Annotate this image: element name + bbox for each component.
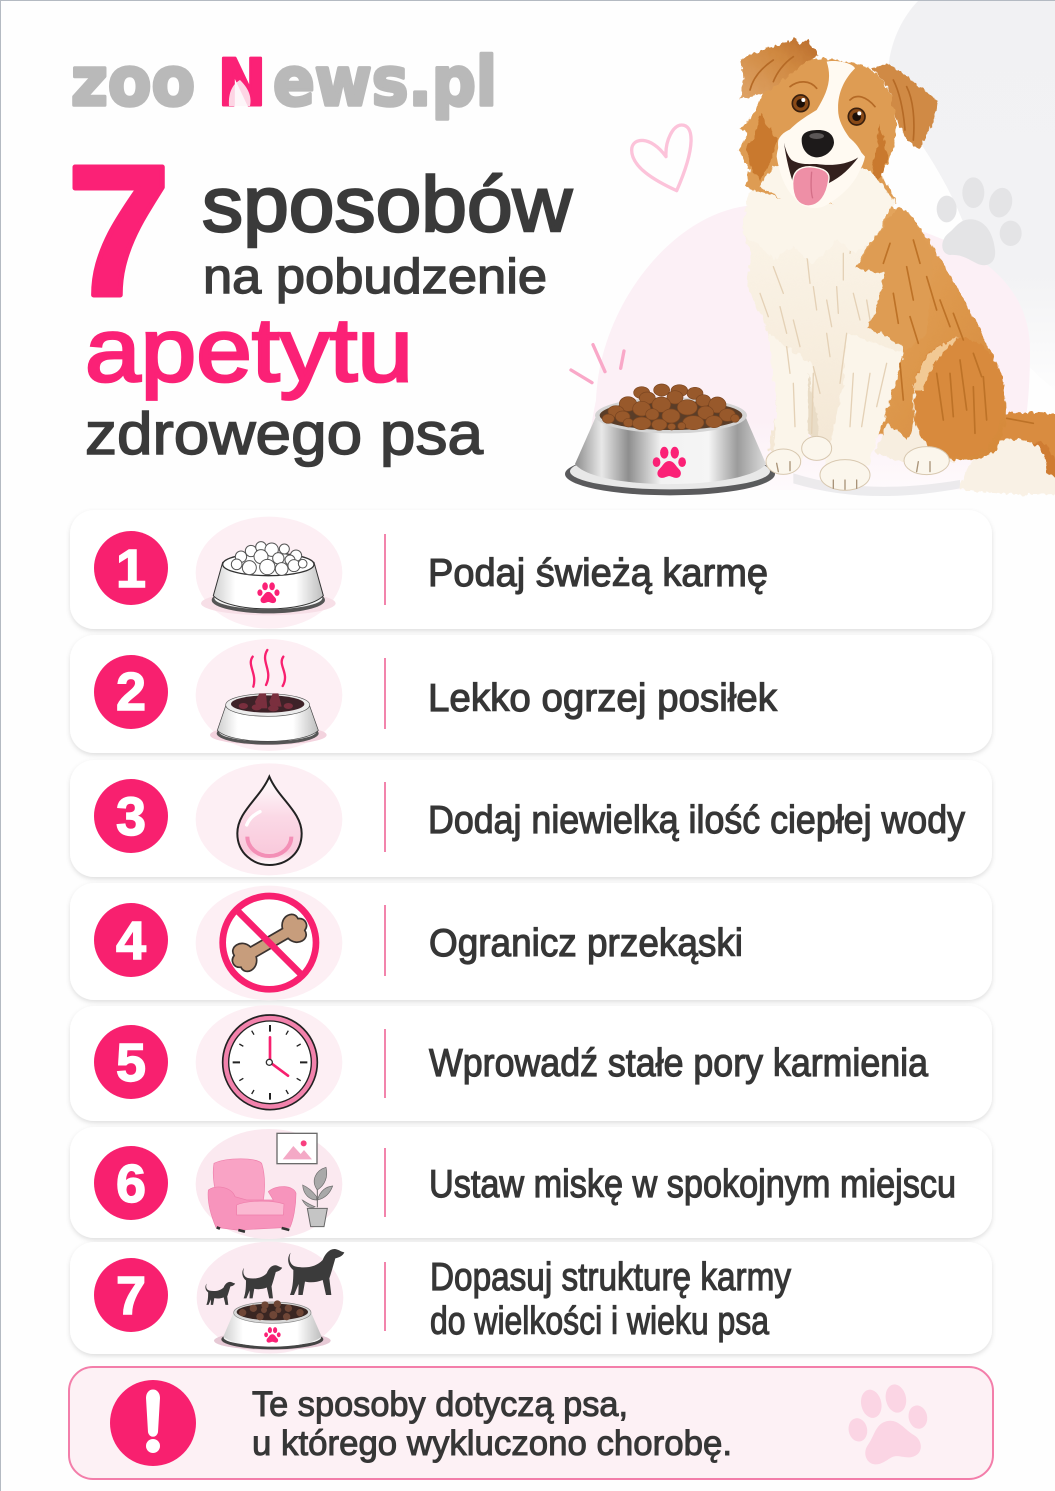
number badge [94,779,168,853]
divider [384,782,386,852]
callout panel [69,1367,993,1479]
armchair [208,1159,296,1232]
number badge [94,531,168,605]
step 1 card [70,510,992,629]
icon: food bowl [565,384,775,495]
number badge [94,903,168,977]
step 2 card [70,635,992,753]
card background [70,1127,992,1238]
icon: clock [196,1005,342,1120]
icon: warm food bowl [196,639,342,751]
divider [384,534,386,605]
note text: Te sposoby dotyczą psa, [252,1385,628,1424]
picture frame [277,1133,317,1164]
nose [802,130,834,157]
number badge: 7 [116,1266,146,1326]
step text: Lekko ogrzej posiłek [428,677,777,720]
title line: apetytu: apetytu [85,301,413,401]
paws [766,436,949,490]
step text: do wielkości i wieku psa [430,1300,769,1343]
divider [384,905,386,976]
callout note [69,1367,993,1479]
logo [71,43,497,122]
title line: sposobów: sposobów [202,160,573,248]
divider [384,1262,386,1331]
step 5 card [70,1005,992,1121]
step text: Ogranicz przekąski [429,922,743,965]
face shading [750,57,914,140]
step 4 card [70,883,992,1000]
step 7 card [70,1242,992,1354]
number badge: 5 [116,1033,146,1093]
icon: no treats [196,886,342,1000]
eyes [792,95,865,125]
logo: N [218,47,266,121]
fur shading [760,227,887,433]
number badge: 2 [116,662,146,722]
step text: Dopasuj strukturę karmy [430,1256,791,1299]
tongue [793,167,829,206]
background shapes [588,1,1055,490]
icon: dogs of different sizes with bowl [197,1242,344,1354]
icon: bowl with fresh kibble [196,517,342,629]
card background [70,1242,992,1354]
icon: water drop [196,763,342,875]
icon: heart [632,125,691,191]
title line: na pobudzenie: na pobudzenie [203,250,547,304]
number badge: 3 [116,787,146,847]
potted plant [302,1167,333,1227]
sparkle lines [571,345,624,383]
divider [384,658,386,729]
mouth [784,143,858,188]
number badge [94,655,168,729]
note text [252,1385,732,1463]
muzzle [778,125,863,208]
card background [70,760,992,877]
floor shadow [793,473,960,496]
title line: zdrowego psa: zdrowego psa [85,401,483,467]
step 3 card [70,760,992,877]
ruff and head fur [738,38,938,263]
step 6 card [70,1127,992,1239]
icon: quiet room [196,1129,342,1239]
illustration: dog [738,38,1055,496]
number badge [94,1146,168,1220]
card background [70,510,992,629]
number badge: 6 [116,1154,146,1214]
number badge [94,1025,168,1099]
number badge: 4 [116,911,146,971]
card background [70,883,992,1000]
note text: u którego wykluczono chorobę. [252,1424,732,1463]
step text: Wprowadź stałe pory karmienia [429,1042,928,1085]
icon: exclamation mark [110,1380,196,1466]
step text: Ustaw miskę w spokojnym miejscu [429,1163,956,1206]
number badge: 1 [116,539,146,599]
divider [384,1148,386,1217]
step text: Podaj świeżą karmę [428,552,768,595]
fur silhouette [742,187,1055,494]
white blaze [777,61,865,207]
card background [70,635,992,753]
logo: zoo [71,43,195,122]
number badge [94,1258,168,1332]
logo: ews.pl [273,43,497,122]
step text [430,1256,791,1343]
hero illustration [565,38,1055,496]
icon: grey paw [937,177,1022,265]
card background [70,1006,992,1121]
icon: pale paw [841,1379,935,1469]
title: big seven: 7 [67,128,170,335]
step text: Dodaj niewielką ilość ciepłej wody [428,799,965,842]
divider [384,1029,386,1098]
